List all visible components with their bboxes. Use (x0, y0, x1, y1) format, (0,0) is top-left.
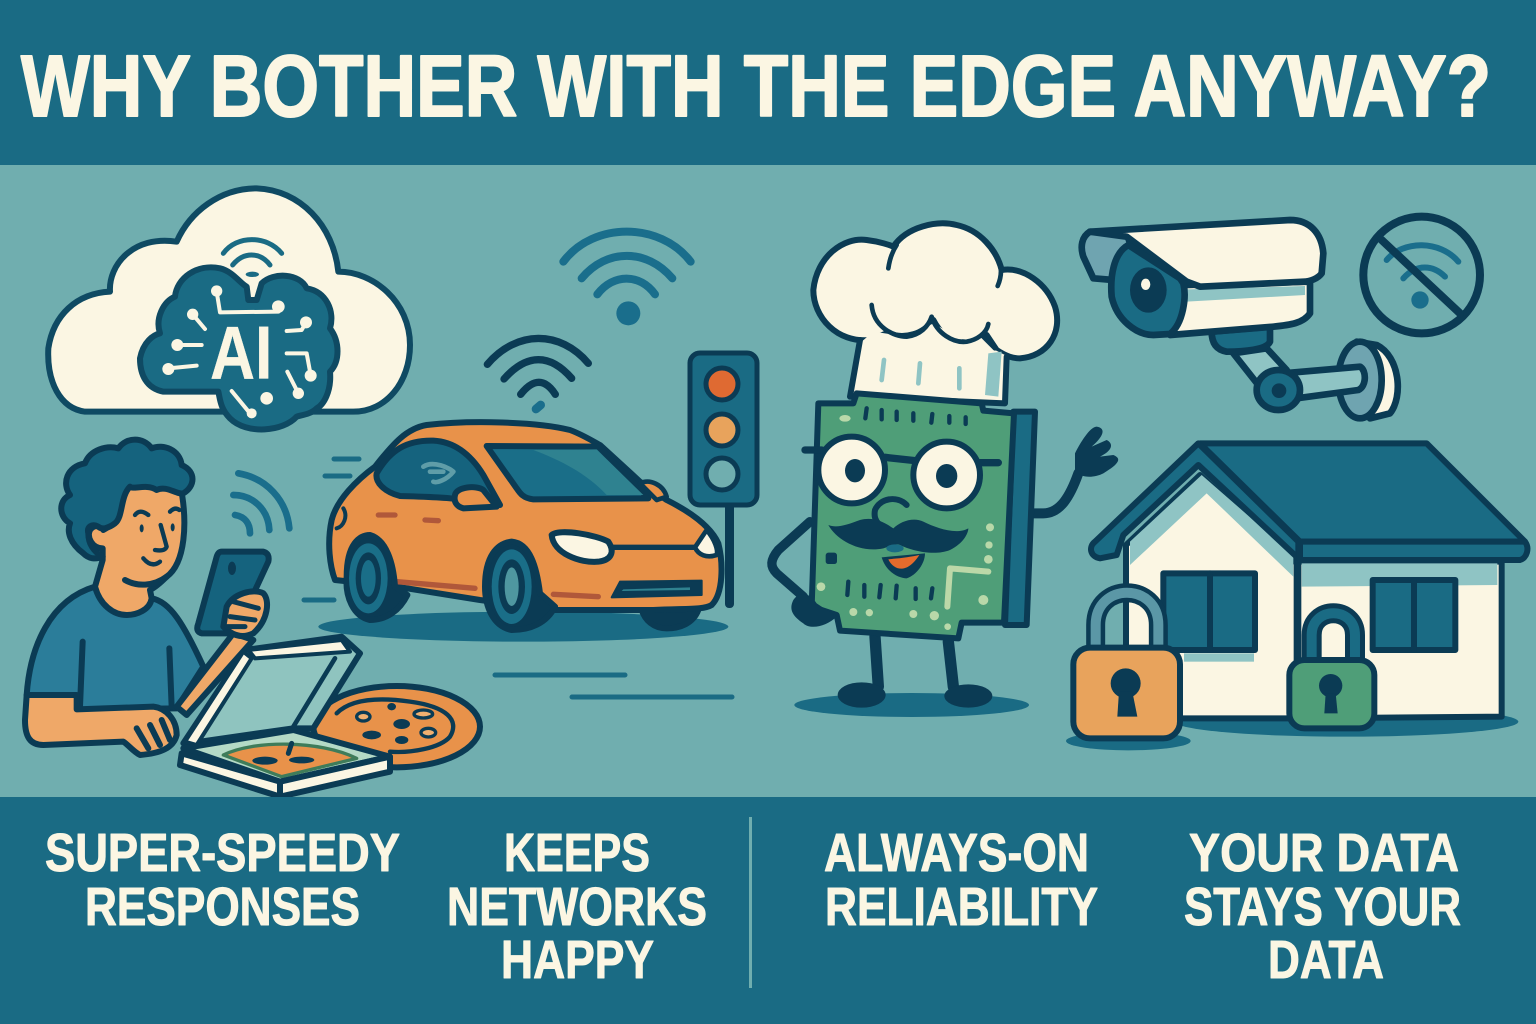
icon: green padlock (1289, 613, 1374, 728)
caption: your data stays your data: STAYS YOUR (1184, 877, 1461, 937)
pins (847, 408, 966, 599)
legs (875, 637, 953, 687)
headlight (552, 532, 612, 562)
icon: orange car (318, 422, 728, 642)
panel: scene illustrations (25, 188, 1527, 797)
roof (1200, 443, 1525, 542)
header band (0, 0, 1536, 165)
nose (875, 499, 907, 528)
caption: always-on reliability (824, 823, 1098, 937)
body (329, 422, 722, 610)
label: AI: AI (210, 310, 272, 394)
icon: chip chef character (772, 223, 1118, 717)
windows (1184, 653, 1254, 662)
left hand (791, 594, 837, 627)
trim (378, 515, 598, 597)
arms (772, 522, 810, 597)
caption: always-on reliability: ALWAYS-ON (824, 823, 1089, 883)
icon: no wifi (1363, 217, 1480, 333)
caption: your data stays your data (1184, 823, 1461, 990)
icon: person with phone (25, 440, 269, 755)
caption: always-on reliability: RELIABILITY (825, 877, 1098, 937)
caption: super-speedy responses: SUPER-SPEEDY (45, 823, 400, 883)
front wheel (485, 542, 555, 630)
footer band (0, 797, 1536, 1024)
hat puff (813, 223, 1057, 358)
speed lines (304, 459, 732, 697)
back bracket (1082, 232, 1130, 280)
side window (376, 441, 500, 505)
icon: pizza and box (180, 637, 480, 797)
lower body (1170, 282, 1310, 335)
glasses and eyes (818, 437, 885, 503)
mouth (882, 553, 925, 578)
caption: keeps networks happy (447, 823, 707, 990)
icon: wifi large (563, 232, 691, 325)
hand (223, 591, 267, 636)
walls (1126, 475, 1297, 718)
hat band (850, 323, 1005, 403)
icon: traffic light (690, 353, 757, 608)
icon: AI cloud (48, 188, 410, 429)
far wheel (642, 610, 698, 628)
mirror (455, 487, 497, 508)
grille (612, 581, 702, 597)
icon: wifi near person (233, 473, 289, 533)
icon: AI brain (140, 267, 337, 429)
hair (61, 440, 192, 558)
circuit traces (168, 292, 311, 413)
icon: wifi on cloud (223, 240, 282, 277)
housing (1090, 220, 1323, 287)
caption: your data stays your data: DATA (1268, 930, 1384, 990)
windshield (487, 446, 648, 499)
moustache (828, 519, 968, 553)
lower arm and hand (25, 695, 177, 755)
head (89, 475, 184, 615)
phone (197, 552, 269, 633)
wall plate (1357, 342, 1398, 418)
caption: keeps networks happy: HAPPY (501, 930, 654, 990)
icon: security camera (1082, 220, 1398, 418)
rear wheel (346, 535, 407, 620)
icon: wifi near car (487, 338, 588, 409)
caption: keeps networks happy: KEEPS (504, 823, 650, 883)
caption: keeps networks happy: NETWORKS (447, 877, 707, 937)
raised arm (177, 633, 253, 715)
arm (1233, 348, 1287, 385)
icon: house (1091, 443, 1527, 737)
pizza (313, 686, 480, 767)
caption: super-speedy responses (45, 823, 400, 937)
board (812, 393, 1014, 638)
box lid (183, 637, 360, 743)
box base (183, 730, 390, 782)
board side (1005, 412, 1035, 625)
caption: super-speedy responses: RESPONSES (85, 877, 360, 937)
caption: your data stays your data: YOUR DATA (1189, 823, 1459, 883)
face features (135, 509, 179, 564)
icon: orange padlock (1066, 593, 1191, 750)
shirt (27, 587, 203, 710)
lens (1111, 245, 1185, 335)
